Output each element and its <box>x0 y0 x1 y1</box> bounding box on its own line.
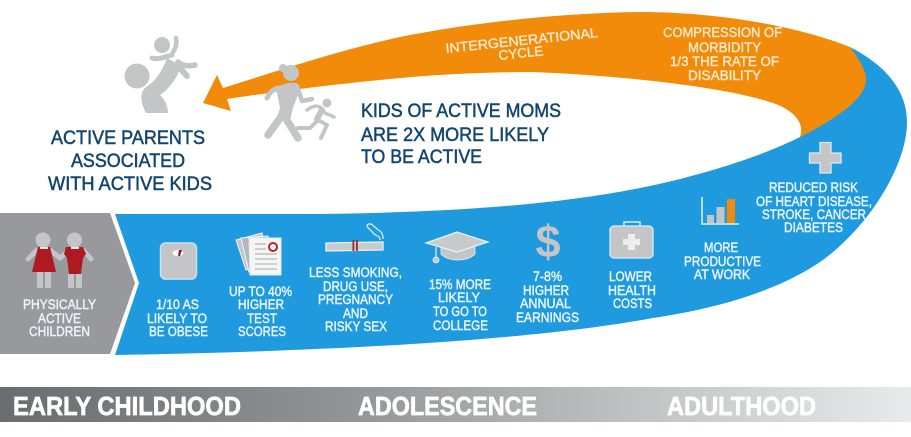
label: productive <box>684 240 761 282</box>
label: test scores: TEST <box>247 311 277 326</box>
icon: medical kit <box>610 222 653 258</box>
label: less smoking: AND <box>343 306 368 321</box>
heading: kids of active moms <box>361 101 561 168</box>
icon: health cross <box>810 142 841 173</box>
label: college <box>429 277 491 333</box>
label: adulthood: ADULTHOOD <box>667 391 816 421</box>
label: intergenerational cycle: CYCLE <box>498 43 544 63</box>
label: test scores: UP TO 40% <box>229 284 292 299</box>
item: productivity <box>684 197 761 282</box>
label: less smoking: PREGNANCY <box>318 292 393 307</box>
label: earnings: ANNUAL <box>520 296 571 311</box>
icon: bathroom scale <box>160 243 196 279</box>
label: health costs: COSTS <box>613 296 652 311</box>
icon: bar chart <box>702 197 739 224</box>
label: earnings: EARNINGS <box>516 310 579 325</box>
heading: active parents associated with active kids: ACTIVE PARENTS <box>51 128 205 149</box>
panel: orange intergenerational arrow <box>203 12 866 137</box>
label: reduced risk: OF HEART DISEASE, <box>756 194 872 209</box>
label: less smoking: RISKY SEX <box>325 319 387 334</box>
label: obese <box>147 297 208 339</box>
label: earnings <box>516 269 579 325</box>
heading: kids of active moms: TO BE ACTIVE <box>361 147 482 168</box>
label: compression of morbidity <box>663 25 782 83</box>
icon: parent lifting baby <box>124 37 195 113</box>
item: earnings <box>516 216 579 325</box>
label: college: 15% MORE <box>429 277 491 292</box>
label: physically active children: ACTIVE <box>38 311 81 326</box>
label: test scores: SCORES <box>238 324 286 339</box>
item: less smoking <box>309 224 402 334</box>
label: earnings: HIGHER <box>523 283 569 298</box>
label: health costs: LOWER <box>609 269 652 284</box>
label: college: TO GO TO <box>433 304 487 319</box>
item: health costs <box>608 222 656 311</box>
label: reduced risk: STROKE, CANCER <box>762 207 866 222</box>
icon: dollar sign: $ <box>535 216 561 267</box>
icon: mother and child running <box>267 64 334 138</box>
label: compression of morbidity: 1/3 THE RATE OF <box>670 54 779 69</box>
heading: active parents associated with active kids <box>48 128 212 195</box>
label: reduced risk: REDUCED RISK <box>769 180 858 195</box>
label: earnings: 7-8% <box>533 269 562 284</box>
heading: active parents associated with active kids: WITH ACTIVE KIDS <box>48 174 212 195</box>
label: college: COLLEGE <box>433 318 488 333</box>
label: productive: PRODUCTIVE <box>684 254 761 269</box>
label: obese: 1/10 AS <box>156 297 199 312</box>
label: less smoking <box>309 265 402 334</box>
label: productive: MORE <box>704 240 738 255</box>
label: reduced risk: DIABETES <box>784 220 843 235</box>
label: obese: LIKELY TO <box>147 311 207 326</box>
label: reduced risk <box>756 180 872 235</box>
label: test scores: HIGHER <box>238 297 284 312</box>
icon: cigarette <box>326 224 383 251</box>
heading: kids of active moms: ARE 2X MORE LIKELY <box>361 125 549 146</box>
label: productive: AT WORK <box>694 267 750 282</box>
label: adolescence: ADOLESCENCE <box>358 391 537 421</box>
label: less smoking: DRUG USE, <box>323 279 388 294</box>
label: early childhood: EARLY CHILDHOOD <box>13 391 241 421</box>
timeline bar <box>0 387 911 422</box>
label: compression of morbidity: COMPRESSION OF <box>663 25 782 40</box>
label: test scores <box>229 284 292 339</box>
item: obesity <box>147 243 208 339</box>
icon: graduation cap <box>426 232 488 263</box>
label: health costs: HEALTH <box>608 283 656 298</box>
label: compression of morbidity: DISABILITY <box>688 68 761 83</box>
label: physically active children: PHYSICALLY <box>23 297 96 312</box>
label: health costs <box>608 269 656 311</box>
label: intergenerational cycle: INTERGENERATIONAL <box>445 25 599 56</box>
heading: active parents associated with active kids: ASSOCIATED <box>71 151 185 172</box>
item: college <box>426 232 491 333</box>
heading: kids of active moms: KIDS OF ACTIVE MOMS <box>361 101 561 122</box>
label: physically active children <box>23 297 96 339</box>
panel: blue life-course band <box>115 47 907 355</box>
icon: two children holding hands <box>28 232 91 288</box>
label: physically active children: CHILDREN <box>29 324 90 339</box>
label: college: LIKELY <box>438 290 480 305</box>
label: compression of morbidity: MORBIDITY <box>688 40 761 55</box>
panel: physically active children chevron <box>0 213 135 354</box>
label: obese: BE OBESE <box>149 324 208 339</box>
item: test scores <box>229 233 292 339</box>
item: reduced risk <box>756 142 872 235</box>
icon: test papers <box>236 233 281 275</box>
label: less smoking: LESS SMOKING, <box>309 265 402 280</box>
